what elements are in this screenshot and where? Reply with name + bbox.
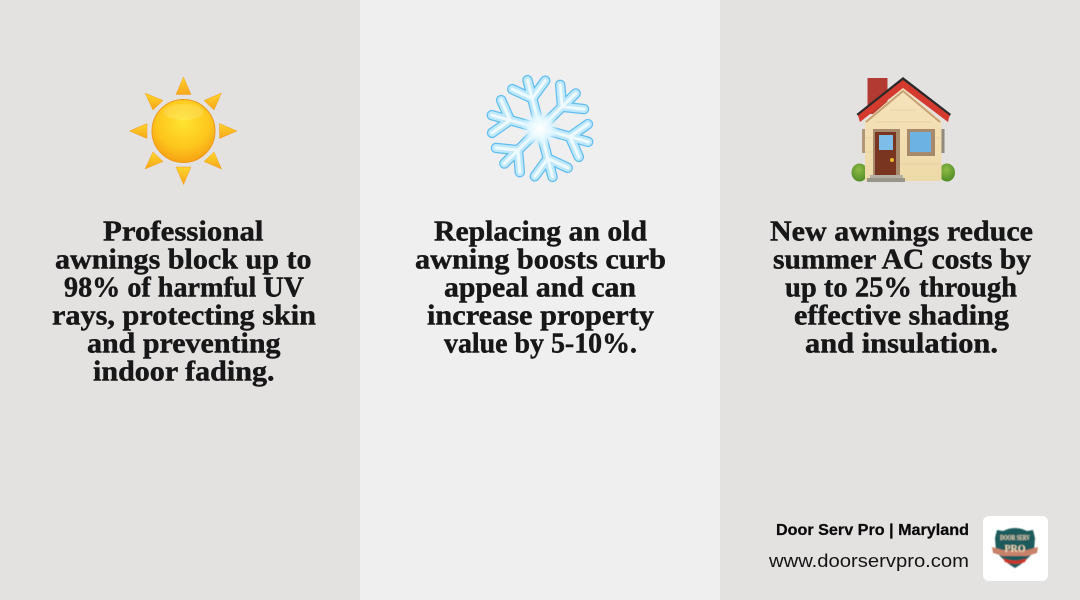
logo card [983,516,1048,581]
heading: UV protection text: 98% of harmful UV [64,272,304,304]
heading: UV protection text [52,216,316,388]
heading: curb appeal text: value by 5-10%. [444,328,637,360]
text: website: www.doorservpro.com [768,551,969,571]
panel: UV protection [0,0,360,600]
icon: snowflake [477,67,603,190]
heading: UV protection text: rays, protecting skin [52,300,316,332]
heading: energy savings text: and insulation. [805,328,998,360]
heading: energy savings text: New awnings reduce [770,216,1033,248]
icon: house [852,77,955,182]
panel: energy savings [720,0,1080,600]
logo card: PRO [1004,544,1026,555]
heading: UV protection text: indoor fading. [93,356,274,388]
heading: curb appeal text: Replacing an old [434,216,647,248]
heading: energy savings text: summer AC costs by [773,244,1032,276]
heading: energy savings text: up to 25% through [785,272,1017,304]
panel: curb appeal [360,0,720,600]
heading: curb appeal text: increase property [427,300,655,332]
heading: energy savings text: effective shading [794,300,1010,332]
heading: curb appeal text: appeal and can [444,272,636,304]
heading: UV protection text: awnings block up to [55,244,312,276]
heading: curb appeal text [415,216,666,360]
heading: curb appeal text: awning boosts curb [415,244,666,276]
text: brand name: Door Serv Pro | Maryland [776,522,969,539]
heading: UV protection text: Professional [103,216,264,248]
logo card: DOOR SERV [1000,534,1030,542]
icon: sun [130,77,237,184]
heading: energy savings text [770,216,1033,360]
heading: UV protection text: and preventing [87,328,281,360]
